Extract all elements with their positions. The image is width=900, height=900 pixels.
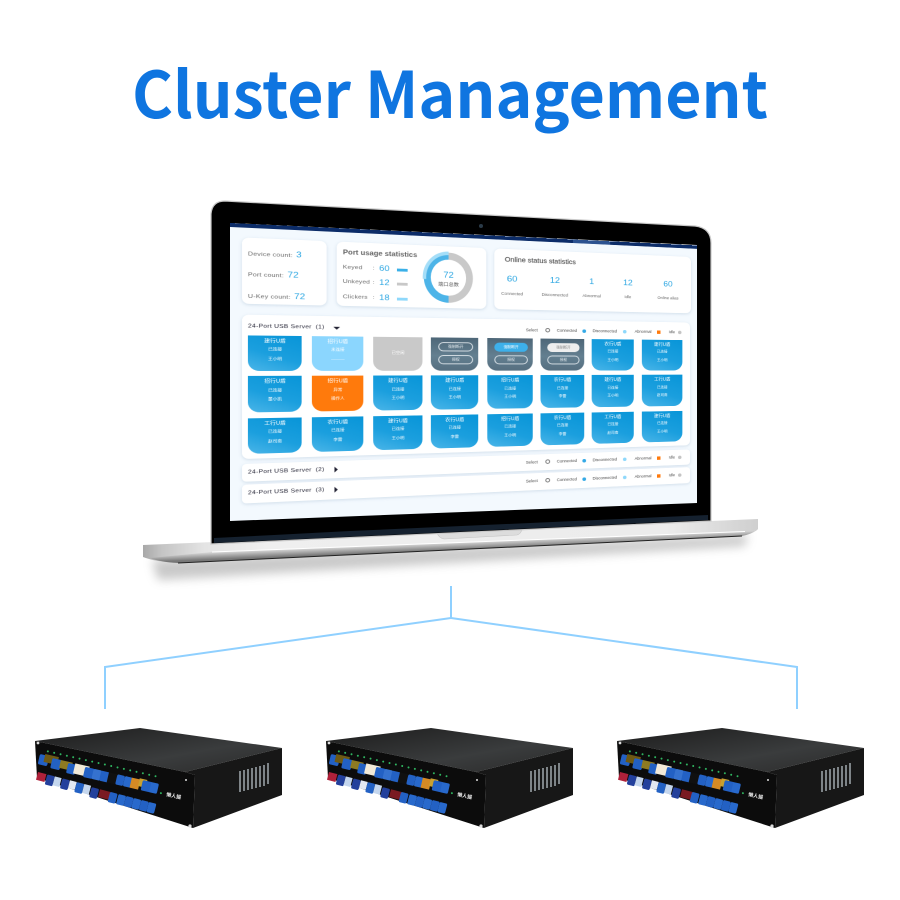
server unit 2: 懒人猫 <box>457 791 473 801</box>
status legend: Idle <box>669 472 675 477</box>
tile row 2: 王小明 <box>607 393 618 397</box>
tile row 2: 建行U盾 <box>604 377 621 383</box>
tile row 2: 已连接 <box>392 386 404 391</box>
tile row 2: 已连接 <box>504 385 516 390</box>
status legend: Select <box>526 459 538 464</box>
unkeyed row: : <box>373 280 375 286</box>
connected label: Connected <box>501 291 523 296</box>
tile row 1: 强制断开 <box>448 344 464 348</box>
panel: server 2 <box>242 449 690 482</box>
tile row 1: 建行U盾 <box>264 338 286 344</box>
tile row 1: 王小明 <box>268 356 282 361</box>
tile row 3: 已连接 <box>449 425 461 430</box>
unkeyed bar <box>397 283 408 286</box>
tile row 3: 已连接 <box>392 426 404 431</box>
tile row 2: 王小明 <box>449 395 461 399</box>
disconnected value: 12 <box>550 275 560 285</box>
collapse arrow <box>333 326 340 329</box>
server heading: 24-Port USB Server (2) <box>248 467 325 476</box>
tile row 3: 农行U盾 <box>445 417 464 423</box>
laptop body <box>143 200 758 584</box>
screen background <box>230 223 697 521</box>
idle value: 12 <box>623 278 633 288</box>
tile row 1: 授权 <box>560 358 567 361</box>
status legend <box>526 327 682 334</box>
keyed bar <box>397 268 408 271</box>
tile row 3: 赵司南 <box>607 430 618 434</box>
tile row 2: 建行U盾 <box>388 378 408 384</box>
server unit 1 <box>35 728 282 828</box>
tile row 2: 农行U盾 <box>554 378 571 383</box>
tile row 1: 招行U盾 <box>327 339 348 345</box>
tile row 2: 董小凯 <box>268 396 282 401</box>
tile row 1: 已连接 <box>657 349 668 353</box>
tile row 3: 李雷 <box>333 436 342 441</box>
clickers bar <box>397 297 408 300</box>
tile row 3: 王小明 <box>392 435 404 440</box>
tile row 1: 农行U盾 <box>604 341 621 347</box>
tile row 1: 授权 <box>507 358 515 361</box>
panel: online status statistics <box>494 248 691 313</box>
tile row 3: 王小明 <box>504 432 516 437</box>
status legend: Abnormal <box>635 473 651 478</box>
tile row 2 <box>248 374 682 412</box>
strip highlight <box>573 240 610 245</box>
keyed row <box>343 263 390 273</box>
tile row 3: 农行U盾 <box>554 415 571 421</box>
tile row 2: 招行U盾 <box>264 379 286 385</box>
tile row 3: 已连接 <box>557 423 568 427</box>
expand arrow <box>334 467 338 472</box>
top status strip <box>230 223 697 249</box>
tile row 3: 农行U盾 <box>327 419 348 425</box>
tile row 2: 建行U盾 <box>445 378 464 384</box>
unkeyed row: 12 <box>379 277 390 287</box>
tile row 2: 已连接 <box>268 387 282 392</box>
tile row 1: 强制断开 <box>556 345 571 349</box>
tile row 3: 赵司南 <box>268 438 282 443</box>
tile row 1: 已连接 <box>268 346 282 351</box>
tile row 1: 已空闲 <box>392 350 404 354</box>
disconnected label: Disconnected <box>542 292 568 297</box>
status legend <box>526 455 682 464</box>
port count: Port count: 72 <box>248 269 299 279</box>
tile row 3: 建行U盾 <box>388 418 408 424</box>
status legend: Idle <box>669 455 675 459</box>
status legend: Connected <box>557 328 577 332</box>
tile row 2: 已连接 <box>657 384 668 389</box>
tile row 2: 王小明 <box>504 394 516 399</box>
panel: port usage statistics <box>337 241 486 308</box>
server heading: 24-Port USB Server (3) <box>248 487 325 496</box>
tile row 1: ——— <box>331 356 345 361</box>
online label: Online alias <box>657 295 678 300</box>
bezel lower edge <box>214 513 708 543</box>
heading: Port usage statistics <box>343 249 417 259</box>
trackpad notch <box>437 529 522 539</box>
donut chart <box>422 251 477 306</box>
tile row 1: 授权 <box>452 357 460 361</box>
tile row 2: 招行U盾 <box>327 378 348 384</box>
laptop lid <box>211 201 711 544</box>
tile row 1: 建行U盾 <box>654 342 670 347</box>
tile row 3: 李雷 <box>451 434 459 438</box>
status legend: Abnormal <box>635 455 651 460</box>
tile row 3: 工行U盾 <box>604 414 621 420</box>
tile row 1: 王小明 <box>657 357 668 362</box>
tile row 3 <box>248 410 682 454</box>
clickers row: Clickers <box>343 294 368 300</box>
tile row 2: 已连接 <box>449 386 461 391</box>
tile row 2: 操作人 <box>331 396 345 401</box>
unkeyed row: Unkeyed <box>343 279 370 286</box>
status legend: Connected <box>557 458 577 463</box>
status legend: Disconnected <box>593 475 617 480</box>
tile row 2: 异常 <box>333 387 342 391</box>
tile row 3: 建行U盾 <box>654 413 670 419</box>
donut chart: 端口总数 <box>471 301 477 306</box>
tile row 2: 赵司南 <box>657 393 668 397</box>
laptop base <box>143 519 758 563</box>
clickers row: : <box>373 295 375 300</box>
tile row 3: 招行U盾 <box>501 416 519 422</box>
tile row 3: 已连接 <box>607 422 618 426</box>
laptop screen dashboard <box>230 223 697 506</box>
heading: Online status statistics <box>505 255 576 266</box>
server heading: 24-Port USB Server (1) <box>248 324 325 330</box>
tile row 2: 已连接 <box>607 385 618 389</box>
keyed row: 60 <box>379 263 390 273</box>
tile row 1: 王小明 <box>607 357 618 361</box>
status legend: Connected <box>557 476 577 482</box>
tile row 3: 已连接 <box>504 424 516 428</box>
keyed row: : <box>373 265 375 271</box>
tile row 2: 王小明 <box>392 395 404 400</box>
server unit 3: 懒人猫 <box>748 791 764 801</box>
server unit 1: 懒人猫 <box>166 791 182 801</box>
keyed row: Keyed <box>343 264 362 271</box>
panel: server 3 <box>242 467 690 503</box>
server unit 3 <box>617 728 864 828</box>
u-key count: U-Key count: 72 <box>248 291 305 301</box>
tile grid <box>248 335 682 454</box>
status legend: Select <box>526 478 538 483</box>
tile row 2: 已连接 <box>557 385 568 390</box>
tile row 1: 未连接 <box>331 347 345 352</box>
panel: device counts <box>242 237 327 305</box>
tile row 3: 李雷 <box>559 431 566 436</box>
device count: Device count: 3 <box>248 249 302 259</box>
tile row 2: 工行U盾 <box>654 377 670 382</box>
tile row 1: 已连接 <box>607 349 618 353</box>
connector lines <box>105 586 797 709</box>
connected value: 60 <box>507 274 517 284</box>
tile row 3: 已连接 <box>657 420 668 425</box>
abnormal value: 1 <box>589 277 594 286</box>
camera <box>479 224 483 228</box>
tile row 3: 王小明 <box>657 429 668 433</box>
status legend: Select <box>526 327 538 332</box>
laptop shadow <box>152 535 748 580</box>
panel: server 1 <box>242 315 690 459</box>
tile row 3: 已连接 <box>268 429 282 434</box>
donut chart: 72 <box>443 271 454 280</box>
clickers row <box>342 292 390 302</box>
tile row 2: 李雷 <box>559 394 566 398</box>
online value: 60 <box>663 279 673 289</box>
tile row 3: 工行U盾 <box>264 420 286 426</box>
server unit 2 <box>326 728 573 828</box>
status legend: Disconnected <box>593 328 617 333</box>
abnormal label: Abnormal <box>582 293 601 298</box>
tile row 3: 已连接 <box>331 427 345 432</box>
unkeyed row <box>343 277 390 287</box>
status legend: Idle <box>669 329 675 334</box>
status legend <box>526 472 682 483</box>
tile row 1: 强制断开 <box>504 345 519 349</box>
expand arrow <box>334 487 338 493</box>
status legend: Disconnected <box>593 457 617 462</box>
tile row 1 <box>248 335 682 371</box>
tile row 2: 招行U盾 <box>501 378 519 383</box>
clickers row: 18 <box>379 292 390 302</box>
idle label: Idle <box>625 294 631 299</box>
status legend: Abnormal <box>635 329 651 333</box>
title: Cluster Management <box>132 45 768 137</box>
